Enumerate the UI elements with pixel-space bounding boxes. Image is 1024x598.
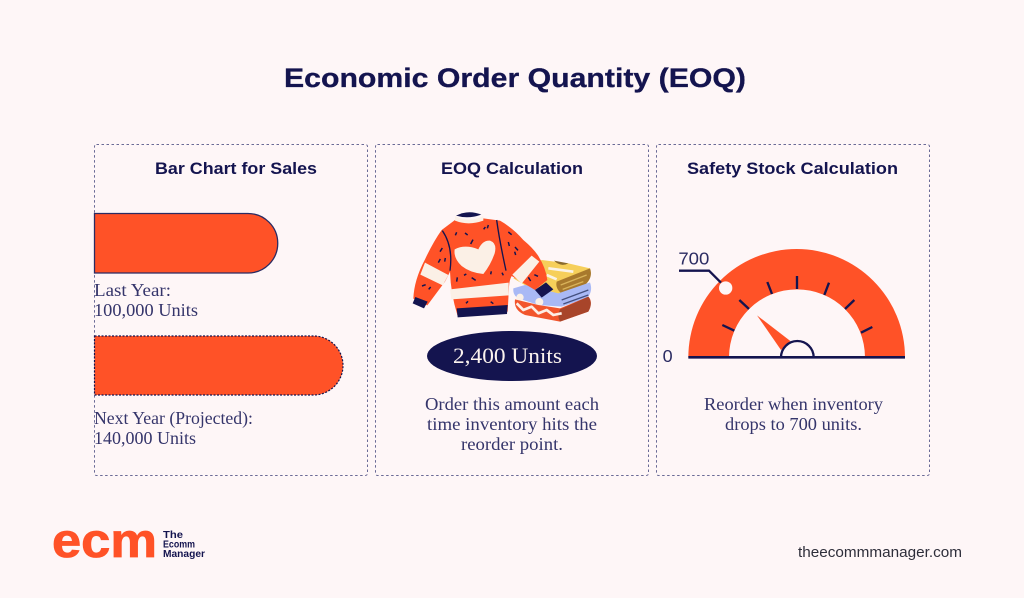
gauge marker: 700: 700 (678, 248, 709, 268)
icon: sweater and folded blankets (413, 212, 591, 322)
text: order instruction: time inventory hits the (427, 414, 597, 434)
gauge chart (663, 248, 905, 366)
label: next year: 140,000 Units (94, 428, 196, 448)
text: reorder instruction: drops to 700 units. (725, 414, 862, 434)
label: next year: Next Year (Projected): (94, 408, 253, 429)
logo: ecm The Ecomm Manager: Ecomm (163, 538, 195, 550)
website url: theecommmanager.com (798, 545, 962, 561)
heading: safety stock: Safety Stock Calculation (687, 159, 898, 178)
panel: safety stock calculation (656, 144, 930, 476)
logo: ecm The Ecomm Manager: Manager (163, 548, 205, 560)
badge: 2,400 units: 2,400 Units (453, 343, 562, 368)
title: Economic Order Quantity (EOQ) (284, 63, 746, 93)
bar: next year (94, 336, 343, 395)
heading: EOQ calculation: EOQ Calculation (441, 159, 583, 178)
text: order instruction: reorder point. (461, 434, 563, 454)
text: reorder instruction: Reorder when inventory (704, 394, 883, 414)
bar: last year (94, 214, 278, 273)
gauge marker: 700 (678, 248, 732, 295)
logo: ecm The Ecomm Manager: ecm (52, 515, 157, 568)
gauge zero label: 0 (663, 346, 673, 366)
panel: EOQ calculation (376, 144, 648, 476)
label: last year: Last Year: (94, 280, 171, 300)
heading: bar chart: Bar Chart for Sales (155, 159, 317, 178)
badge: 2,400 units (427, 331, 597, 381)
label: last year: 100,000 Units (94, 300, 198, 320)
panel: bar chart for sales (94, 144, 368, 476)
logo: ecm The Ecomm Manager (52, 515, 205, 568)
logo: ecm The Ecomm Manager: The (163, 529, 183, 541)
gauge needle (757, 315, 790, 350)
text: order instruction: Order this amount each (425, 394, 599, 414)
